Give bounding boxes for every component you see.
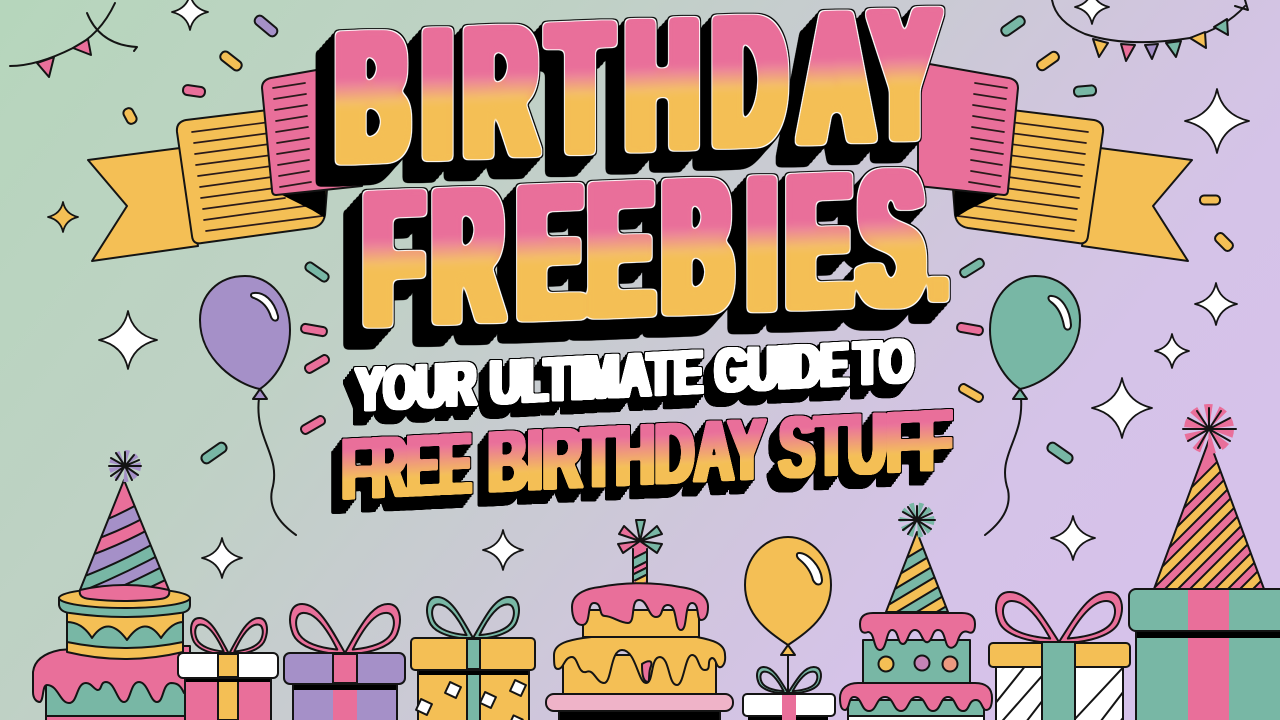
gift: yellow with teal bow — [411, 597, 535, 720]
subtitle: YOUR ULTIMATE GUIDE TO: TO — [854, 327, 913, 399]
subtitle: FREE BIRTHDAY STUFF: FREE — [342, 415, 472, 517]
balloon: purple — [200, 276, 296, 535]
gift: striped with teal ribbon — [989, 592, 1140, 720]
bunting: top right — [1052, 0, 1248, 61]
teal cake with party hat — [840, 506, 992, 720]
balloon: yellow — [745, 537, 831, 694]
subtitle: FREE BIRTHDAY STUFF: BIRTHDAY — [488, 402, 765, 511]
gift: white lid pink box — [178, 618, 278, 720]
subtitle: YOUR ULTIMATE GUIDE TO: GUIDE — [715, 330, 848, 406]
gift: purple — [284, 604, 405, 720]
left cake with party hat — [33, 452, 190, 720]
title line: FREEBIES.: . — [934, 182, 943, 328]
confetti pieces — [122, 14, 1235, 465]
gift: large teal with pink ribbon — [1129, 589, 1280, 720]
ribbon banner: left — [88, 62, 362, 261]
title line: FREEBIES.: FREEBIES — [365, 131, 922, 366]
sparkle stars — [48, 0, 1249, 578]
subtitle: YOUR ULTIMATE GUIDE TO — [356, 327, 913, 425]
ribbon banner: right — [918, 62, 1192, 261]
balloon: teal — [985, 276, 1080, 535]
pom pom: centre right hat — [899, 506, 935, 534]
party hat: centre right — [885, 531, 949, 612]
party hat: striped left — [78, 479, 170, 602]
subtitle: YOUR ULTIMATE GUIDE TO: YOUR — [356, 350, 476, 425]
pom pom: right hat — [1183, 408, 1236, 448]
centre cake with candle — [546, 520, 733, 720]
gift: small white with teal bow — [743, 667, 835, 720]
subtitle: FREE BIRTHDAY STUFF: STUFF — [779, 392, 952, 497]
bunting: top left — [10, 3, 137, 77]
party hat: right large — [1153, 439, 1265, 588]
candle — [618, 520, 662, 586]
pom pom: left hat — [109, 452, 141, 480]
subtitle: FREE BIRTHDAY STUFF — [342, 392, 952, 518]
subtitle: YOUR ULTIMATE GUIDE TO: ULTIMATE — [490, 338, 703, 418]
